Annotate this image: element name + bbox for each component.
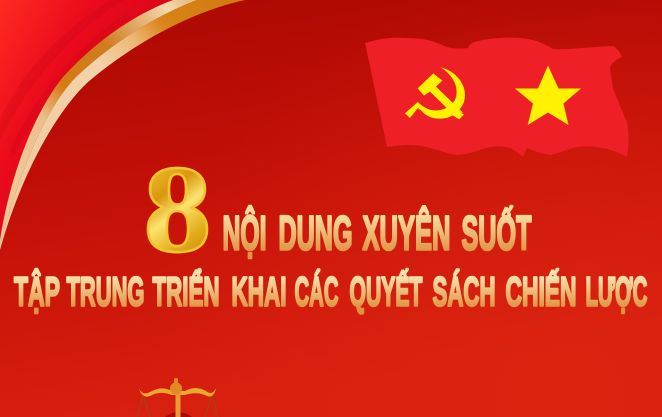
heading line 1: XUYÊN <box>362 206 450 260</box>
numeral 8: 8 <box>144 141 212 279</box>
heading line 2: TẬP <box>14 268 60 314</box>
icon: hammer and sickle <box>405 67 465 119</box>
heading line 2: TRIỂN <box>152 268 220 314</box>
heading line 1: SUỐT <box>462 206 532 260</box>
heading line 2: SÁCH <box>432 268 496 314</box>
heading line 2: TRUNG <box>66 268 144 314</box>
heading line 2: KHAI <box>232 268 286 314</box>
heading line 1: DUNG <box>278 208 352 260</box>
flag cloth <box>365 38 628 157</box>
heading line 2 <box>14 268 648 314</box>
heading line 2: QUYẾT <box>350 268 422 314</box>
heading line 2: CHIẾN <box>506 268 576 314</box>
flag <box>365 38 628 157</box>
heading line 2: CÁC <box>294 268 338 314</box>
gold ribbon <box>0 0 245 250</box>
icon: yellow star <box>515 66 581 125</box>
heading line 1: NỘI <box>222 206 266 260</box>
heading line 1 <box>222 206 532 260</box>
icon: scales of justice <box>137 378 218 417</box>
red curtain corner <box>0 0 180 240</box>
